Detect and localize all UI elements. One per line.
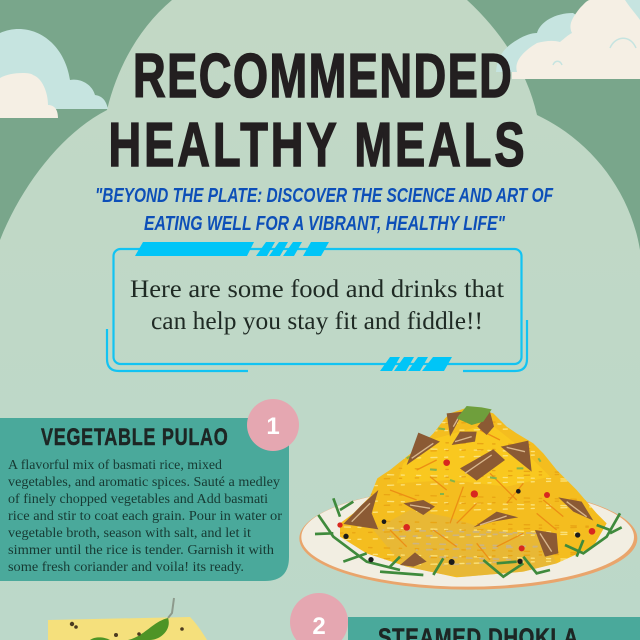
panel background: [348, 617, 640, 640]
panel body text: rice and stir to coat each grain. Pour in water or: [8, 508, 283, 523]
panel background: [0, 418, 289, 581]
meat highlights: [352, 415, 587, 552]
illustration: dhokla: [48, 598, 207, 640]
panel body text: [8, 457, 283, 574]
panel body text: simmer until the rice is tender. Garnish it with: [8, 542, 274, 557]
dhokla body: [48, 617, 207, 640]
panel: vegetable pulao: [0, 418, 289, 581]
number badge 1: [247, 399, 299, 451]
panel body text: vegetables, and aromatic spices. Sauté a medley: [8, 474, 280, 489]
callout text: can help you stay fit and fiddle!!: [151, 308, 483, 335]
meat pieces: [343, 412, 593, 567]
illustration: rice plate: [299, 400, 637, 590]
panel body text: of finely chopped vegetables and Add basmati: [8, 491, 268, 506]
title: RECOMMENDED: [133, 41, 512, 111]
callout top stripes: [135, 242, 329, 256]
callout outer bracket: [107, 320, 527, 371]
panel: steamed dhokla: [348, 617, 640, 640]
subtitle: [95, 185, 554, 235]
number badge 2: 2: [312, 613, 326, 640]
top herb cluster: [457, 406, 492, 425]
panel body text: A flavorful mix of basmati rice, mixed: [8, 457, 222, 472]
rice grain texture: [330, 419, 607, 567]
plate: [299, 487, 637, 590]
callout frame: [114, 249, 522, 364]
number badge 2: [290, 593, 348, 640]
icon: right cloud: [496, 0, 640, 79]
subtitle: EATING WELL FOR A VIBRANT, HEALTHY LIFE": [144, 213, 505, 235]
rice pile: [340, 408, 606, 578]
number badge 1: 1: [266, 413, 280, 440]
background: dark green sky: [0, 0, 640, 260]
panel heading: VEGETABLE PULAO: [41, 425, 228, 451]
dhokla seeds: [70, 622, 184, 637]
callout box: [107, 242, 527, 371]
icon: left cloud: [0, 29, 108, 118]
panel body text: vegetable broth, season with salt, and let it: [8, 525, 251, 540]
peppers and spices: [337, 459, 595, 565]
chilli leaf garnish: [90, 598, 174, 640]
title: [108, 41, 525, 180]
callout text: [130, 276, 504, 335]
panel body text: some fresh coriander and voila! its ready.: [8, 559, 244, 574]
garnish herbs: [315, 498, 622, 577]
callout text: Here are some food and drinks that: [130, 276, 504, 303]
callout bottom stripes: [380, 357, 452, 371]
title: HEALTHY MEALS: [108, 110, 525, 180]
